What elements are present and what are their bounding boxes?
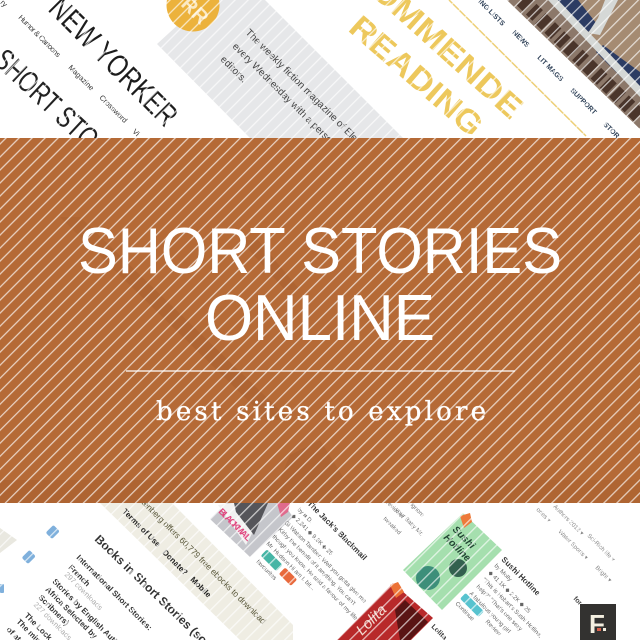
screenshot: book list <box>5 553 154 640</box>
bottom collage: website screenshots <box>0 497 616 640</box>
top collage: website screenshots <box>0 0 640 156</box>
screenshot: neighbouring description text: tweaked <box>382 516 402 536</box>
screenshot: book list: Scribners) <box>37 593 71 628</box>
title: SHORT STORIES <box>78 214 562 287</box>
screenshot: nav links <box>477 0 620 140</box>
screenshot: description text: editors. <box>218 54 249 85</box>
screenshot: nav links: SUPPORT <box>569 87 598 117</box>
screenshot: Jack's Blackmail book cover <box>210 503 293 557</box>
title: ONLINE <box>205 281 435 354</box>
screenshot: Jack's Blackmail description: Mr. Hudson Hi am I. bit... <box>265 541 316 592</box>
divider line <box>126 370 515 372</box>
screenshot: Lolita book cover <box>337 582 433 640</box>
screenshot: grey description panel <box>157 0 403 138</box>
screenshot: Sushi Hotline details: Continue <box>454 601 475 623</box>
screenshot: neighbouring description text: your Batty Mr. <box>394 507 424 538</box>
screenshot: New Yorker nav: Vi <box>131 127 142 138</box>
screenshot: Jack's Blackmail description: by ■ D. <box>296 507 314 525</box>
screenshot: Sushi Hotline book cover: Sushi <box>450 524 477 552</box>
screenshot: Sushi Hotline details: by Molly <box>493 563 512 583</box>
screenshot: description text: The weekly fiction magazine of Ele <box>243 27 360 144</box>
screenshot: Jack's Blackmail description: Kirby the benefit of it anything. You can't <box>277 527 356 607</box>
screenshot: Gutenberg nav <box>121 507 213 600</box>
screenshot: nav links: STOR <box>602 121 620 140</box>
screenshot: Jack's Blackmail buttons <box>261 549 297 586</box>
title <box>78 214 562 354</box>
screenshot: Jack's Blackmail description: The Jack's Blackmail <box>306 499 369 562</box>
decorative yellow rule <box>449 0 586 136</box>
screenshot: left sidebar strip <box>0 528 17 553</box>
screenshot: filter tags: Water Sports ▾ <box>557 529 589 561</box>
screenshot: New Yorker nav: Humor & Cartoons <box>17 13 63 59</box>
screenshot: filter tags <box>535 504 616 607</box>
screenshot: Sushi Hotline details: Sushi Hotline <box>500 555 542 598</box>
screenshot: Jack's Blackmail description: though you know. He said a favour of my life <box>271 534 359 622</box>
icons: blue book icons <box>0 525 60 593</box>
screenshot: neighbouring description text: reviewer <box>385 500 405 520</box>
screenshot: New Yorker nav <box>0 0 142 138</box>
screenshot: Sushi Hotline details: help?" "That's one sexy <box>475 584 523 633</box>
screenshot: nav links: LIT MAGS <box>536 54 564 83</box>
title band <box>0 138 640 503</box>
screenshot: download counts: 297 downloads <box>63 570 105 612</box>
screenshot: Sushi Hotline button <box>460 593 484 617</box>
screenshot: filter tags: Sci-Rich life ▾ <box>586 533 616 563</box>
screenshot: Gutenberg nav: Terms of Use <box>121 507 163 549</box>
screenshot: filter tags: ories ▾ <box>535 507 551 524</box>
screenshot: Sushi Hotline details: ◆ 41.1K ◆ 2.2K ◆ 25 <box>487 570 532 615</box>
screenshot: neighbouring description text <box>382 500 425 538</box>
screenshot: Gutenberg nav: Mobile <box>189 575 213 600</box>
screenshot: Gutenberg nav: Donate? <box>161 548 190 577</box>
screenshot: Recommended Reading heading: READING <box>342 8 491 144</box>
screenshot: Jack's Blackmail book cover: BLACKMAIL <box>217 506 254 543</box>
screenshot: nav links: NEWS <box>511 29 531 49</box>
screenshot: New Yorker nav: Crossword <box>98 93 129 125</box>
screenshot: Jack's Blackmail description: ◆ 2,241 ◆ 9.3K ◆ 25 <box>290 513 334 558</box>
screenshot: Sushi Hotline book cover: Hotline <box>441 532 473 564</box>
bottom collage: website screenshots: tenberg offers 60,779 free ebooks to download <box>140 497 268 626</box>
screenshot: Recommended Reading heading <box>342 0 530 144</box>
subtitle: best sites to explore <box>156 397 486 427</box>
band tonal shadows <box>0 217 640 503</box>
screenshot: Sushi Hotline book cover <box>403 513 502 610</box>
screenshot: New Yorker nav: Magazine <box>67 63 96 92</box>
logo badge <box>580 604 616 640</box>
screenshot: book list: French <box>67 563 92 588</box>
screenshot: Sushi Hotline details: Review <box>484 619 502 638</box>
screenshot: Sushi Hotline details <box>454 555 543 640</box>
screenshot: Jack's Blackmail description: favourites <box>255 559 277 582</box>
screenshot: Gutenberg banner <box>100 503 293 640</box>
screenshot: download counts <box>32 570 105 640</box>
screenshot: description text: every Wednesday with a person <box>230 41 338 150</box>
screenshot: Lolita book cover: Lolita <box>353 601 390 639</box>
logo badge: F <box>589 609 605 639</box>
screenshot: filter tags: for <box>572 595 583 607</box>
screenshot: Sushi Hotline details: A fabulous young girl <box>468 591 511 635</box>
screenshot: filter tags: Bright ▾ <box>594 565 612 584</box>
screenshot: book list: International Short Stories: <box>75 553 154 632</box>
screenshot: Jack's Blackmail description <box>255 499 369 622</box>
screenshot: Sushi Hotline details: "This is Hobart's Sushi Hotline, <box>481 577 543 640</box>
screenshot: book list: Africa Selected by <box>44 585 99 640</box>
screenshot: filter tags: Authors 2012 ▾ <box>552 504 584 537</box>
screenshot: neighbouring description text: I ignore <box>407 500 425 519</box>
screenshot: Jack's Blackmail description: Gi Watson Tamber: Well you gotta give me <box>283 520 367 605</box>
screenshot: photo strip <box>507 0 640 129</box>
icon: RR yellow badge <box>166 0 220 32</box>
band background <box>0 138 640 503</box>
